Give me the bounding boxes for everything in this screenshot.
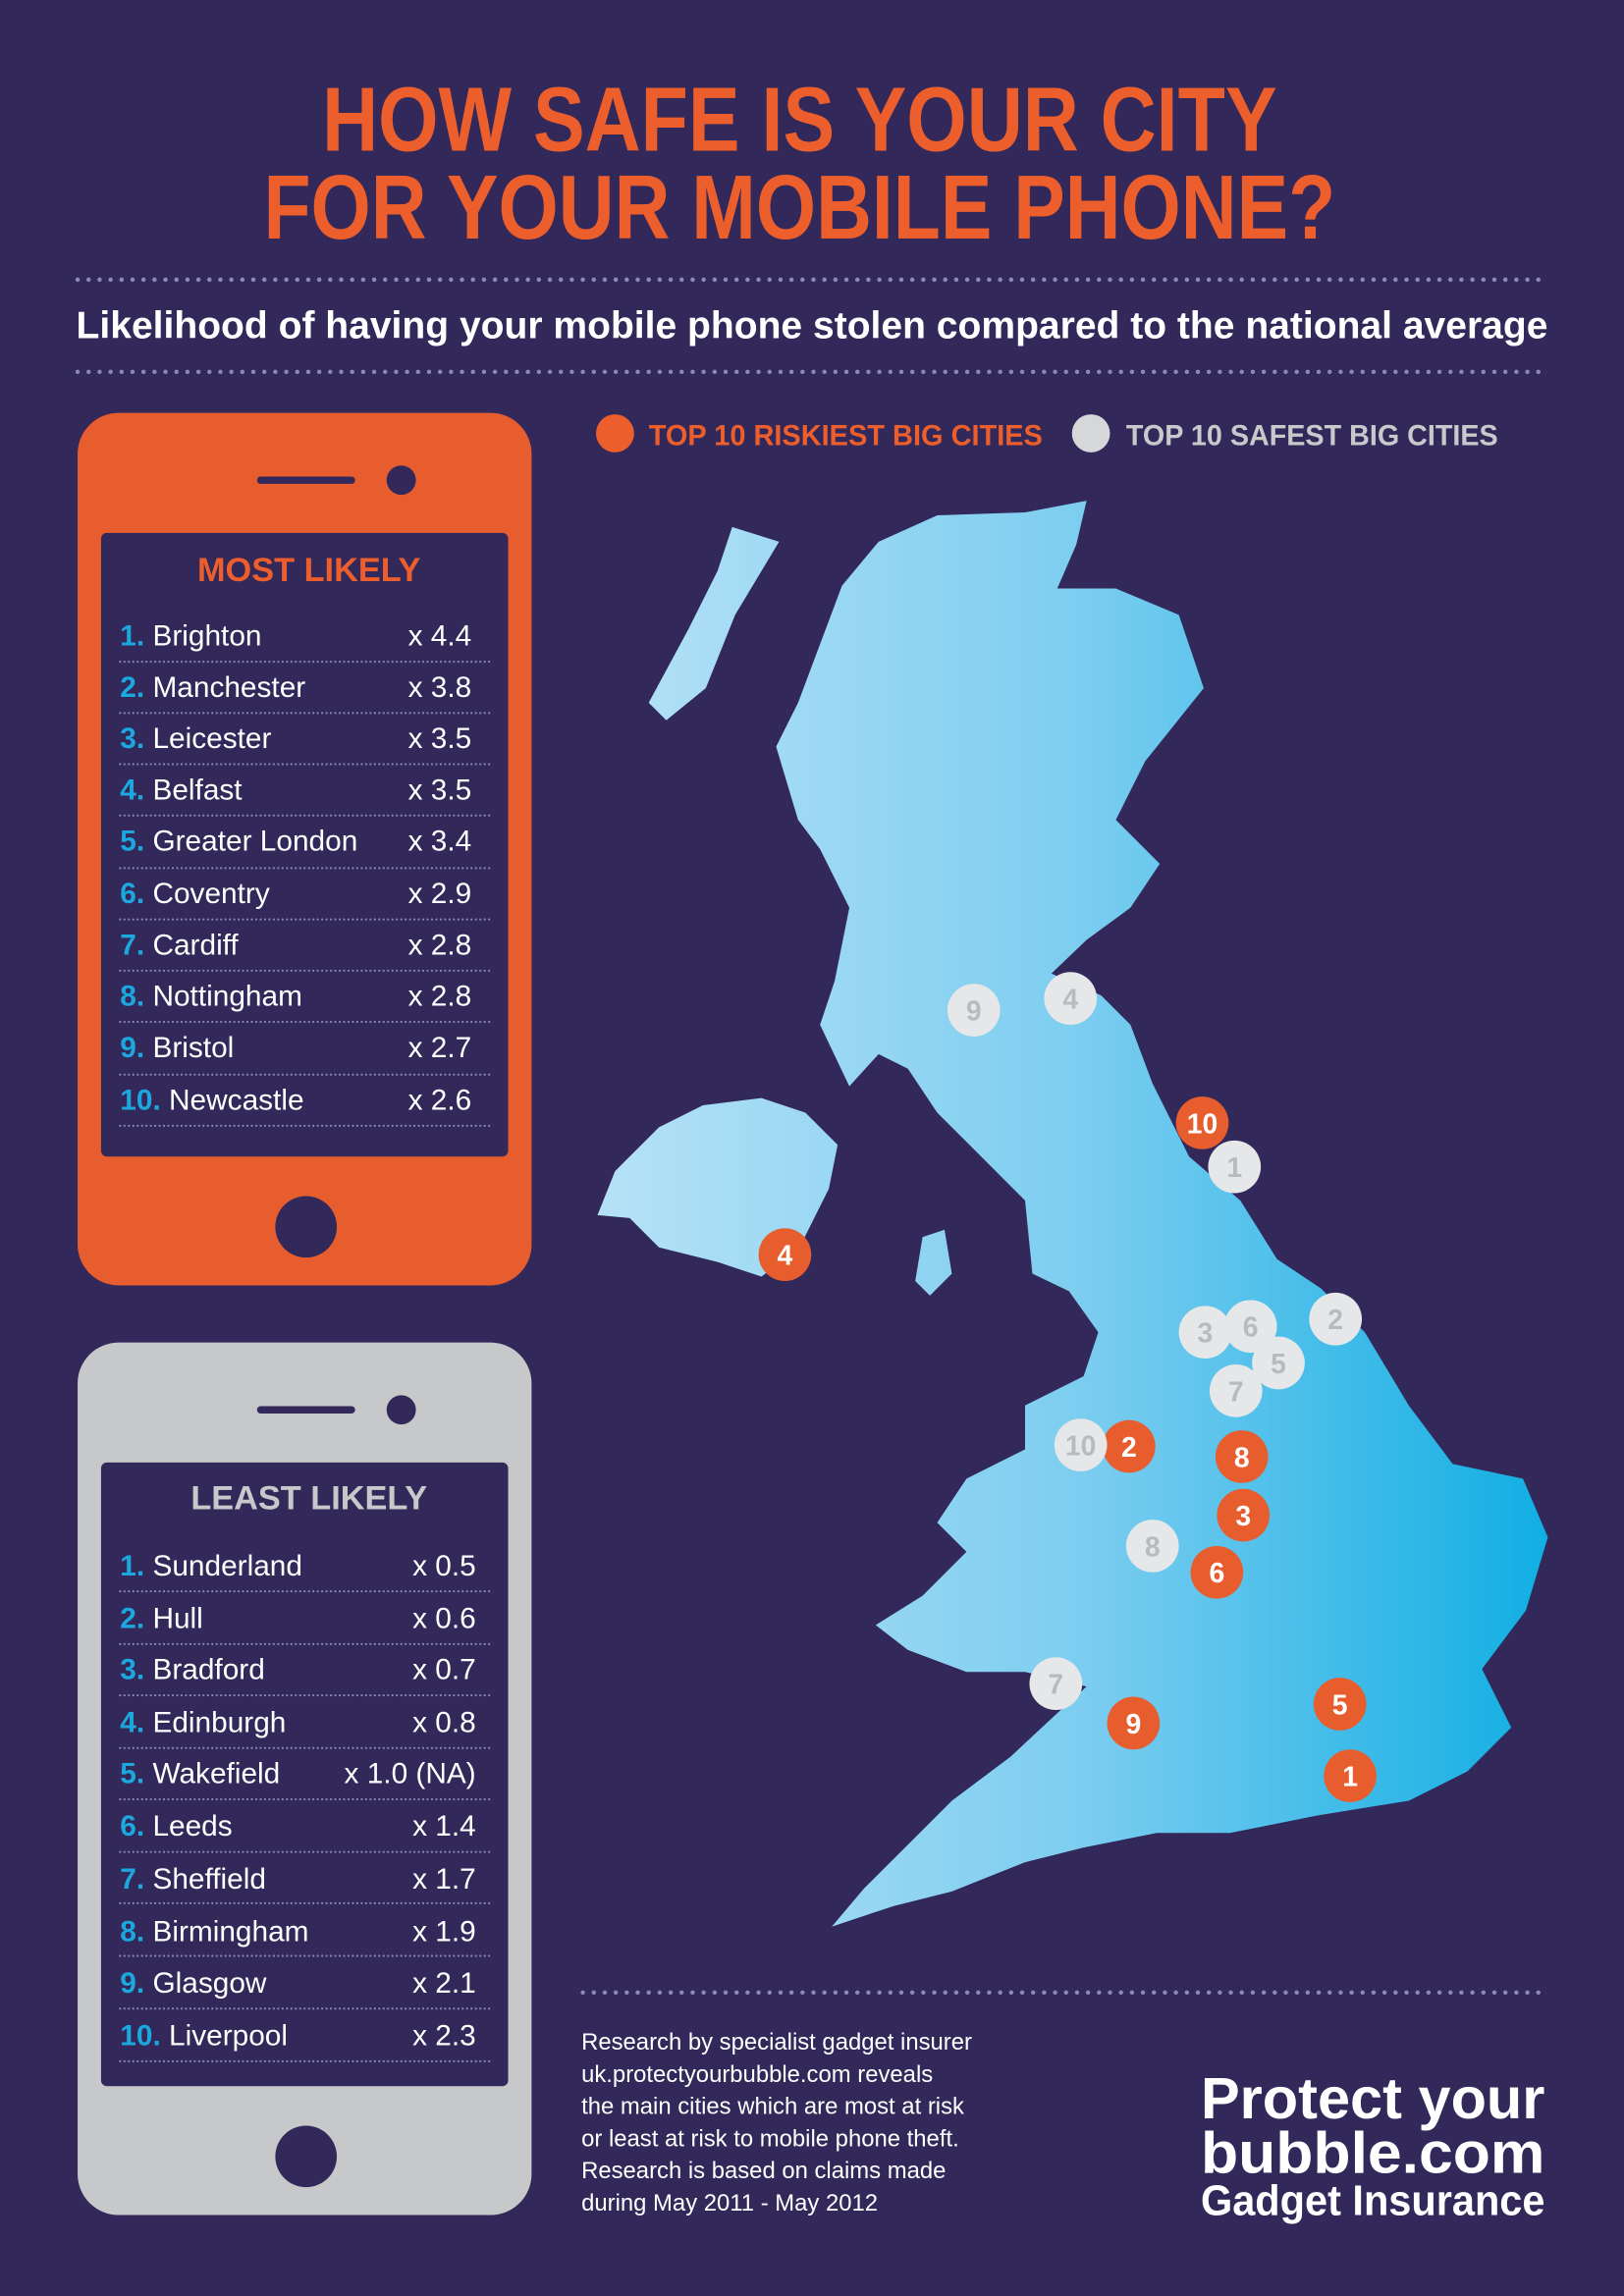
list: least likely: 6. Leeds [120, 1810, 233, 1842]
panel: least likely phone [78, 1343, 531, 2216]
text block: research note [581, 2029, 972, 2216]
list: most likely: x 2.8 [408, 981, 471, 1013]
list: most likely: 9. Bristol [120, 1032, 234, 1064]
legend: TOP 10 SAFEST BIG CITIES [1126, 419, 1498, 452]
map markers: riskiest: 3 [1235, 1501, 1251, 1532]
logo: Protect your [1201, 2065, 1544, 2131]
map markers: riskiest: 5 [1332, 1689, 1348, 1721]
map markers: safest: 5 [1271, 1349, 1286, 1380]
text block: research note: Research by specialist gadget insurer [581, 2029, 972, 2056]
map markers: safest: 4 [1062, 985, 1078, 1016]
list: most likely: 6. Coventry [120, 878, 270, 910]
list: most likely: 3. Leicester [120, 722, 272, 755]
panel: most likely phone [78, 413, 531, 1285]
subtitle: Likelihood of having your mobile phone stolen compared to the national average [77, 305, 1547, 347]
list: most likely: 10. Newcastle [120, 1084, 304, 1116]
list: most likely: x 2.8 [408, 929, 471, 961]
map markers: safest: 3 [1198, 1318, 1213, 1350]
map markers: riskiest: 8 [1234, 1442, 1250, 1473]
list: least likely: x 2.1 [412, 1967, 476, 2000]
list: least likely: x 0.5 [412, 1550, 476, 1582]
list: most likely: 5. Greater London [120, 826, 357, 858]
heading: least likely: LEAST LIKELY [190, 1480, 427, 1518]
list: most likely [120, 620, 492, 1126]
logo: bubble.com [1201, 2119, 1544, 2185]
list: least likely: x 1.9 [412, 1916, 476, 1949]
text block: research note: or least at risk to mobile phone theft. [581, 2125, 959, 2152]
list: least likely: x 0.8 [412, 1706, 476, 1738]
text block: research note: the main cities which are most at risk [581, 2094, 964, 2120]
list: least likely: 1. Sunderland [120, 1550, 302, 1582]
map markers: safest: 9 [966, 996, 982, 1028]
list: most likely: x 2.9 [408, 878, 471, 910]
map markers: safest: 1 [1226, 1152, 1242, 1184]
list: least likely: 9. Glasgow [120, 1967, 267, 2000]
map markers: riskiest: 2 [1121, 1432, 1137, 1464]
list: least likely: x 1.4 [412, 1810, 476, 1842]
list: most likely: 1. Brighton [120, 620, 262, 653]
list: most likely: x 3.5 [408, 722, 471, 755]
map markers: riskiest: 1 [1342, 1762, 1358, 1793]
list: least likely: 2. Hull [120, 1602, 203, 1634]
list: least likely: x 2.3 [412, 2020, 476, 2053]
map markers: safest: 7 [1048, 1670, 1063, 1701]
list: least likely: 7. Sheffield [120, 1863, 266, 1896]
map markers: riskiest [759, 1096, 1377, 1802]
logo: Gadget Insurance [1201, 2178, 1544, 2225]
list: most likely: x 4.4 [408, 620, 471, 653]
title: HOW SAFE IS YOUR CITY [322, 69, 1277, 171]
logo [1201, 2065, 1544, 2225]
map markers: safest: 7 [1228, 1376, 1244, 1408]
map markers: riskiest: 10 [1187, 1108, 1218, 1140]
list: least likely: 4. Edinburgh [120, 1706, 286, 1738]
legend: TOP 10 RISKIEST BIG CITIES [649, 419, 1043, 452]
text block: research note: Research is based on claims made [581, 2158, 946, 2184]
map markers: safest: 6 [1243, 1312, 1259, 1344]
heading: most likely: MOST LIKELY [197, 552, 421, 589]
list: most likely: x 2.6 [408, 1084, 471, 1116]
legend [596, 414, 1498, 453]
list: least likely: x 1.7 [412, 1863, 476, 1896]
map markers: safest: 8 [1145, 1531, 1161, 1563]
map markers: riskiest: 6 [1209, 1558, 1224, 1589]
map: UK [598, 501, 1547, 1927]
title [263, 69, 1335, 258]
list: most likely: x 3.4 [408, 826, 471, 858]
list: least likely: 10. Liverpool [120, 2020, 288, 2053]
list: most likely: 7. Cardiff [120, 929, 239, 961]
list: most likely: x 3.8 [408, 671, 471, 704]
list: most likely: 4. Belfast [120, 774, 243, 806]
list: least likely: x 1.0 (NA) [345, 1758, 476, 1790]
list: least likely [120, 1550, 492, 2061]
map markers: safest: 2 [1327, 1305, 1343, 1336]
title: FOR YOUR MOBILE PHONE? [263, 156, 1335, 258]
map markers: riskiest: 9 [1125, 1709, 1141, 1740]
list: least likely: x 0.7 [412, 1654, 476, 1686]
text block: research note: uk.protectyourbubble.com reveals [581, 2061, 933, 2088]
map markers: safest [947, 972, 1362, 1710]
list: least likely: 3. Bradford [120, 1654, 265, 1686]
map markers: riskiest: 4 [778, 1241, 793, 1272]
list: most likely: 2. Manchester [120, 671, 305, 704]
map markers: safest: 10 [1065, 1430, 1096, 1462]
list: most likely: 8. Nottingham [120, 981, 302, 1013]
list: most likely: x 3.5 [408, 774, 471, 806]
list: least likely: 8. Birmingham [120, 1916, 309, 1949]
list: least likely: 5. Wakefield [120, 1758, 280, 1790]
list: least likely: x 0.6 [412, 1602, 476, 1634]
text block: research note: during May 2011 - May 2012 [581, 2190, 878, 2216]
list: most likely: x 2.7 [408, 1032, 471, 1064]
